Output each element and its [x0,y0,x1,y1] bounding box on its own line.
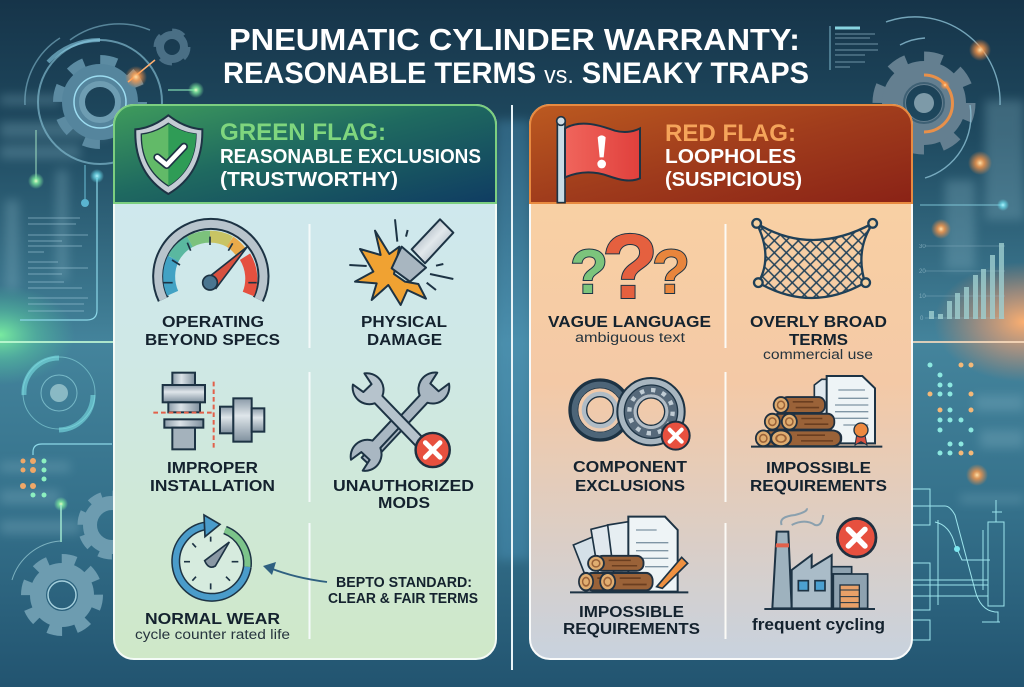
label: normal wear: NORMAL WEAR [145,611,280,628]
heading: red flag: RED FLAG: [665,120,796,147]
label: component exclusions: EXCLUSIONS [575,478,685,495]
icon: question marks [570,216,690,318]
icon: normal wear clock [176,515,247,597]
label: vague language [548,314,711,345]
label: physical damage: DAMAGE [367,332,442,349]
gear: large top left [25,24,162,164]
label: normal wear: cycle counter rated life [135,627,290,642]
gear: small top [158,33,186,61]
icon: question marks: ? [652,238,690,307]
title: PNEUMATIC CYLINDER WARRANTY: [229,22,800,57]
icon: bearings [573,382,690,450]
label: normal wear [135,611,290,642]
heading: green flag: GREEN FLAG: [220,119,386,146]
dividers: green panel [308,224,310,639]
panel: red flag [530,105,912,659]
heading: red flag: (SUSPICIOUS) [665,169,802,191]
heading: green flag: (TRUSTWORTHY) [220,169,398,191]
label: overly broad terms: TERMS [789,332,848,349]
panel body: green [114,105,496,659]
icon: unauthorized mods [346,368,454,475]
label: physical damage [361,314,447,349]
icon: shield with check [135,115,202,194]
chart: right bar chart: 0 [920,316,924,322]
decor: left connectors and text lines [20,60,204,320]
label: unauthorized mods: MODS [378,495,430,512]
chart: right bar chart: 10 [919,294,926,300]
label: impossible requirements [750,460,887,495]
label: unauthorized mods [333,478,474,512]
label: operating beyond specs: OPERATING [162,314,264,331]
chart: right bar chart [919,199,1009,322]
title [223,22,809,90]
heading: red flag: LOOPHOLES [665,146,796,168]
icon: question marks: ? [570,238,608,307]
label: operating beyond specs: BEYOND SPECS [145,332,280,349]
icon: improper installation [153,373,264,450]
chart: right bar chart: 30 [919,244,926,250]
heading: green flag: REASONABLE EXCLUSIONS [220,146,481,168]
icon: net [752,219,877,298]
panel header: red [530,105,912,203]
label: vague language: VAGUE LANGUAGE [548,314,711,331]
icon: question marks: ? [602,216,658,318]
label: operating beyond specs [145,314,280,349]
center divider [511,105,513,670]
chart: right bar chart: 20 [919,269,926,275]
callout: bepto standard [328,575,478,607]
label: overly broad terms: OVERLY BROAD [750,314,887,331]
label: impossible requirements: IMPOSSIBLE [766,460,871,477]
label: component exclusions [573,459,688,495]
label: impossible requirements 2: REQUIREMENTS [563,621,700,638]
icon: red flag [557,117,640,203]
label: improper installation: IMPROPER [167,460,258,477]
label: improper installation: INSTALLATION [150,478,275,495]
label: impossible requirements 2: IMPOSSIBLE [579,604,684,621]
panel: green flag [114,105,496,659]
gears: bottom left [27,496,141,630]
decor: hud circle and indicator dots [12,357,112,580]
icon: physical damage [349,219,453,305]
panel body: red [530,105,912,659]
callout: bepto standard: CLEAR & FAIR TERMS [328,591,478,607]
heading: green flag [220,119,481,191]
label: unauthorized mods: UNAUTHORIZED [333,478,474,495]
decor: right indicator dots and schematic [912,362,1004,640]
label: vague language: ambiguous text [575,330,685,345]
icon: factory [764,508,876,609]
label: frequent cycling: frequent cycling [752,615,885,634]
icon: gauge [158,224,263,299]
gear: top right [830,17,1000,178]
arrow: to normal wear [263,562,327,582]
heading: red flag [665,120,802,191]
icon: logs and documents [570,517,688,592]
label: improper installation [150,460,275,495]
label: physical damage: PHYSICAL [361,314,447,331]
panel header: green [114,105,496,203]
dividers: red panel [724,224,726,639]
label: overly broad terms: commercial use [763,347,873,362]
label: component exclusions: COMPONENT [573,459,688,476]
label: impossible requirements 2 [563,604,700,638]
callout: bepto standard: BEPTO STANDARD: [336,575,472,591]
icon: logs and certificate [751,376,882,447]
label: impossible requirements: REQUIREMENTS [750,478,887,495]
title: REASONABLE TERMS vs. SNEAKY TRAPS [223,57,809,90]
label: overly broad terms [750,314,887,362]
